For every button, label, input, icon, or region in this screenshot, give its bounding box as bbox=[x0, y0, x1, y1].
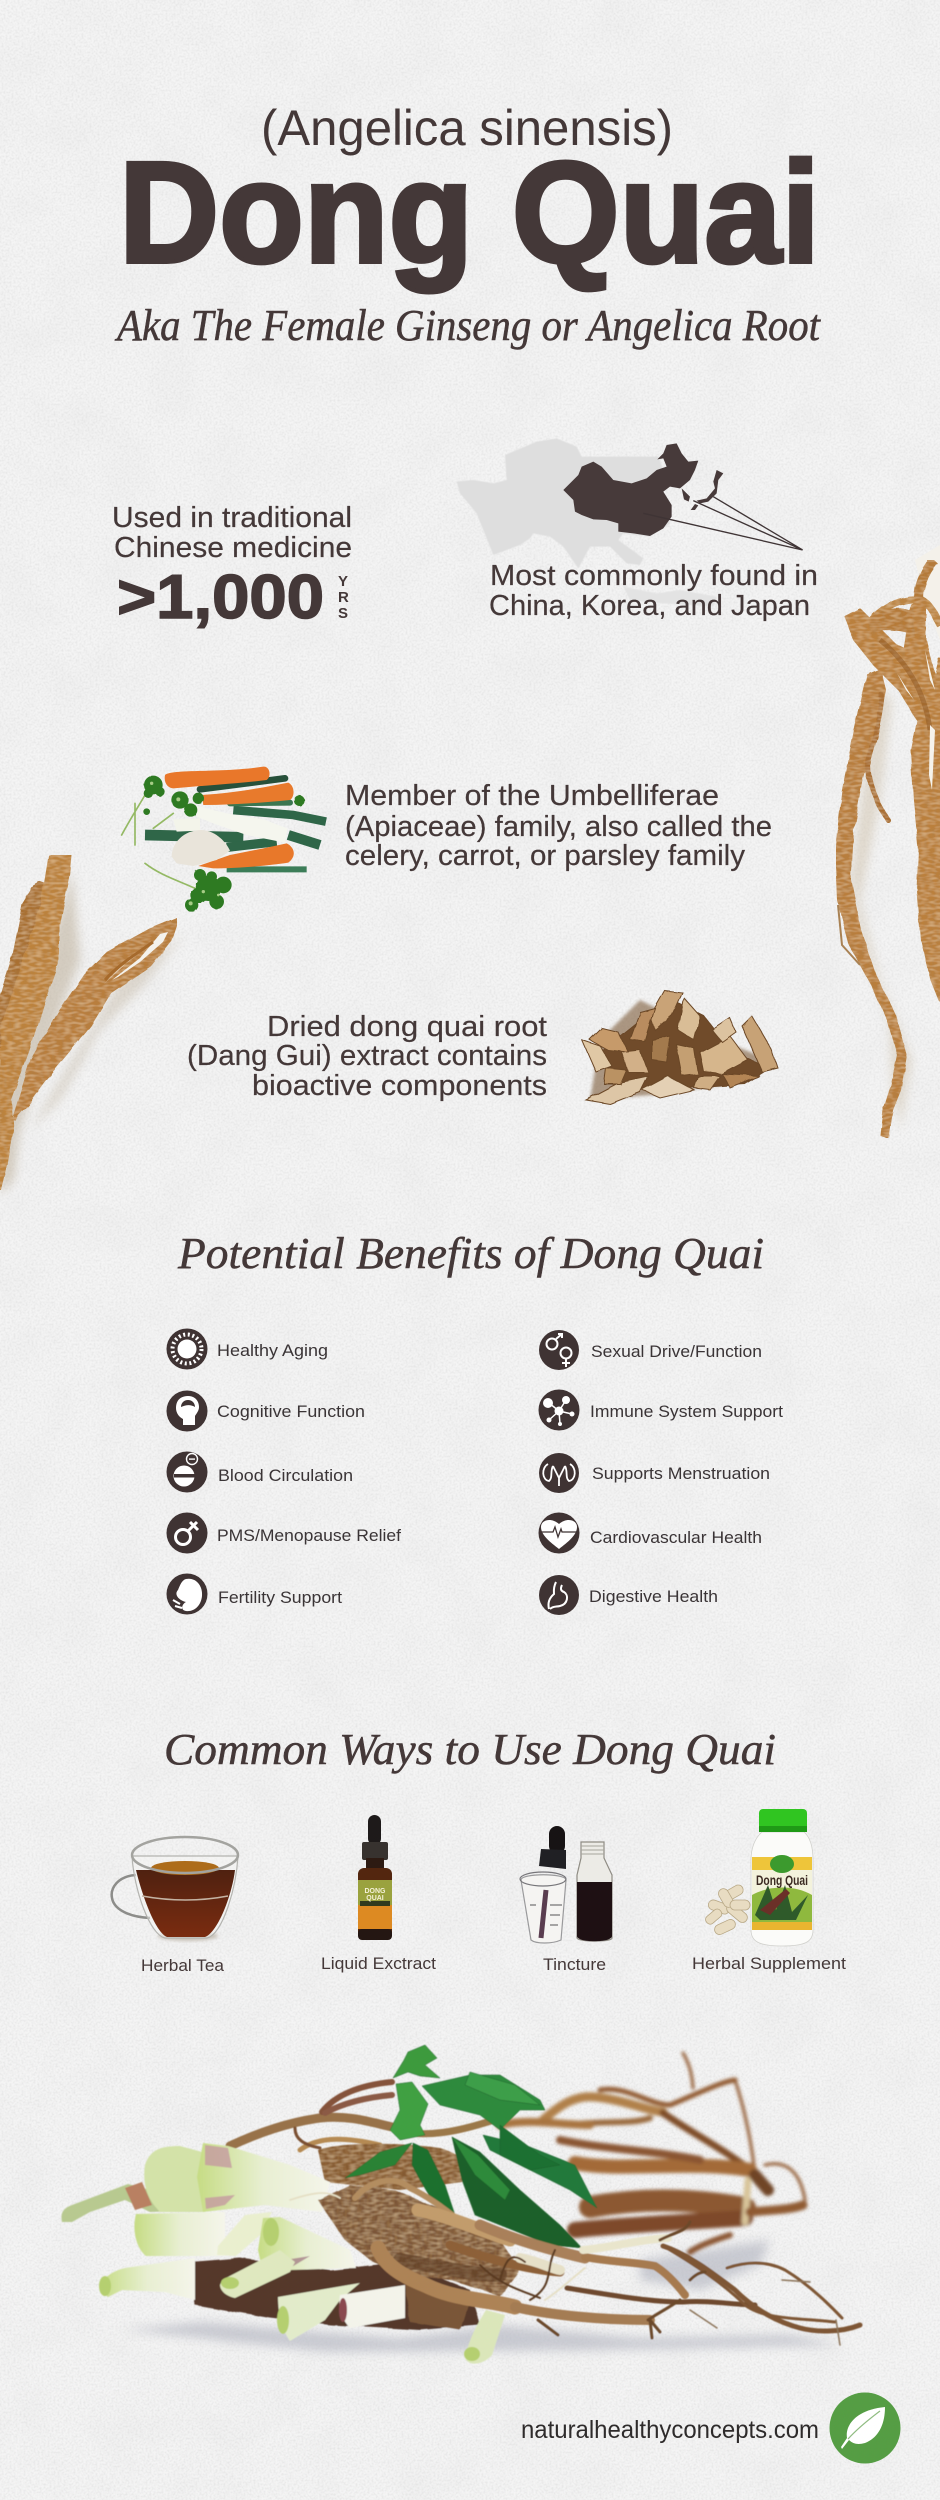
benefit: healthy aging: Healthy Aging bbox=[217, 1341, 328, 1360]
benefits list bbox=[166, 1328, 783, 1615]
liquid extract: Liquid Exctract bbox=[321, 1954, 436, 1973]
benefit: digestive: Digestive Health bbox=[589, 1587, 718, 1606]
rings of root neck bbox=[405, 2283, 470, 2330]
extract text: bioactive components bbox=[252, 1070, 547, 1102]
benefit: menstruation: Supports Menstruation bbox=[592, 1464, 770, 1483]
decorative dried root, right edge bbox=[836, 545, 940, 1138]
tincture: Tincture bbox=[543, 1955, 606, 1974]
vegetables illustration bbox=[122, 767, 326, 912]
dried root slices pile bbox=[582, 990, 778, 1104]
map caption: Most commonly found in bbox=[490, 560, 818, 592]
heading: benefits: Potential Benefits of Dong Quai bbox=[177, 1229, 764, 1278]
stat: years of use: S bbox=[338, 605, 348, 622]
liquid extract bbox=[321, 1815, 436, 1973]
family text: Member of the Umbelliferae bbox=[345, 780, 719, 812]
blurred back roots bbox=[500, 2053, 805, 2252]
benefit: sexual drive bbox=[539, 1330, 762, 1370]
dong quai plant with fresh roots and leaves bbox=[61, 2045, 860, 2364]
ground shadows bbox=[125, 2240, 840, 2352]
map caption: China, Korea, and Japan bbox=[489, 590, 810, 622]
leaves bbox=[345, 2045, 597, 2248]
subtitle: Aka The Female Ginseng or Angelica Root bbox=[114, 301, 822, 350]
herbal tea bbox=[112, 1837, 238, 1975]
extract text: Dried dong quai root bbox=[267, 1011, 547, 1043]
liquid extract: QUAI bbox=[366, 1895, 384, 1902]
family text bbox=[345, 780, 772, 872]
stat: years of use: Y bbox=[338, 573, 348, 590]
benefit: cardiovascular bbox=[538, 1512, 762, 1554]
dark base root bbox=[190, 2258, 480, 2330]
benefit: immune system: Immune System Support bbox=[590, 1402, 783, 1421]
green stalks bbox=[61, 2143, 505, 2364]
herbal supplement: Herbal Supplement bbox=[692, 1954, 846, 1973]
herbal supplement: Dong Quai bbox=[756, 1872, 808, 1888]
benefit: sexual drive: Sexual Drive/Function bbox=[591, 1342, 762, 1361]
benefit: cognitive function: Cognitive Function bbox=[217, 1402, 365, 1421]
decorative dried root, left edge bbox=[0, 855, 183, 1195]
stat: years of use bbox=[112, 502, 352, 632]
benefit: blood circulation bbox=[166, 1452, 353, 1492]
stalk cut ends bbox=[99, 2218, 480, 2361]
title: latin name: (Angelica sinensis) bbox=[261, 100, 673, 156]
map of Asia with China, Korea and Japan highlighted bbox=[457, 438, 803, 607]
stat: years of use: R bbox=[338, 589, 349, 606]
stat: years of use: Used in traditional bbox=[112, 502, 352, 534]
extract text bbox=[187, 1011, 547, 1102]
benefit: healthy aging bbox=[166, 1328, 328, 1370]
family text: (Apiaceae) family, also called the bbox=[345, 811, 772, 843]
stat: years of use: >1,000 bbox=[117, 563, 324, 632]
benefit: PMS and menopause relief bbox=[166, 1512, 401, 1554]
tincture bbox=[520, 1826, 612, 1974]
benefit: digestive bbox=[539, 1575, 718, 1615]
benefit: immune system bbox=[538, 1390, 783, 1430]
liquid extract: DONG bbox=[364, 1888, 386, 1895]
benefit: cognitive function bbox=[166, 1390, 365, 1432]
title: Dong Quai: Dong Quai bbox=[119, 132, 820, 293]
benefit: blood circulation: Blood Circulation bbox=[218, 1466, 353, 1485]
benefit: PMS and menopause relief: PMS/Menopause Relief bbox=[217, 1526, 401, 1545]
herbal supplement bbox=[692, 1809, 846, 1973]
family text: celery, carrot, or parsley family bbox=[345, 840, 745, 872]
extract text: (Dang Gui) extract contains bbox=[187, 1040, 547, 1072]
website address: naturalhealthyconcepts.com bbox=[521, 2416, 819, 2444]
stat: years of use: Chinese medicine bbox=[114, 532, 352, 564]
heading: ways to use: Common Ways to Use Dong Quai bbox=[164, 1725, 776, 1774]
benefit: cardiovascular: Cardiovascular Health bbox=[590, 1528, 762, 1547]
map caption bbox=[489, 560, 818, 622]
herbal tea: Herbal Tea bbox=[141, 1956, 225, 1975]
front fresh roots bbox=[318, 2185, 520, 2296]
benefit: fertility support bbox=[166, 1574, 342, 1614]
logo: green circle with leaf bbox=[830, 2392, 900, 2464]
benefit: menstruation bbox=[539, 1453, 770, 1493]
benefit: fertility support: Fertility Support bbox=[218, 1588, 342, 1607]
back stems and root bbox=[230, 2082, 500, 2150]
